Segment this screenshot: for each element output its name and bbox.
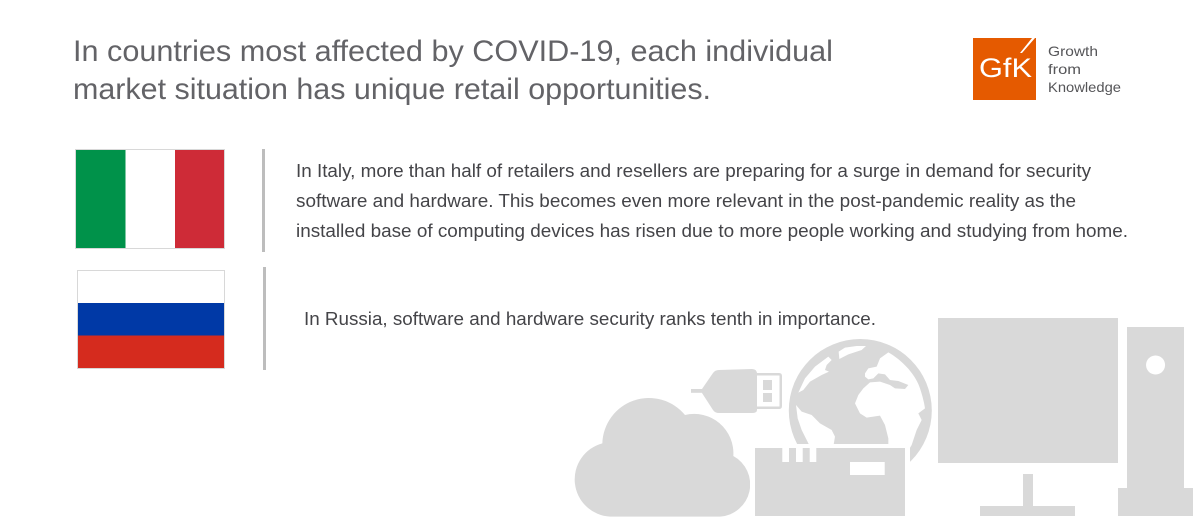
text block: Italy [296,161,1128,241]
text block: Italy: In Italy, more than half of retailers and resellers are preparing for a surge in demand for security [296,161,1091,181]
divider: Italy [262,149,265,252]
divider: Russia [263,267,266,370]
icon: cloud [575,398,750,517]
logo: GfK Growth from Knowledge: from [1048,61,1081,77]
logo: GfK Growth from Knowledge: Growth [1048,43,1098,59]
title [73,35,833,106]
logo: GfK Growth from Knowledge [973,38,1121,100]
title: In countries most affected by COVID-19, each individual [73,35,833,68]
text block: Russia: In Russia, software and hardware security ranks tenth in importance. [304,309,876,329]
title: market situation has unique retail opportunities. [73,73,711,106]
icon: computer tower [1118,327,1193,516]
text block: Italy: installed base of computing devices has risen due to more people working and studying from home. [296,221,1128,241]
icon: box [750,444,910,523]
logo: GfK Growth from Knowledge: Knowledge [1048,79,1121,95]
icon: USB stick [691,369,782,413]
logo: GfK Growth from Knowledge: GfK [979,53,1032,83]
icon: globe [789,339,932,482]
oceans [796,346,925,453]
icon: monitor [938,318,1118,516]
flag: Russia [78,270,224,368]
flag: Italy [76,150,224,248]
text block: Italy: software and hardware. This becomes even more relevant in the post-pandemic reality as the [296,191,1076,211]
